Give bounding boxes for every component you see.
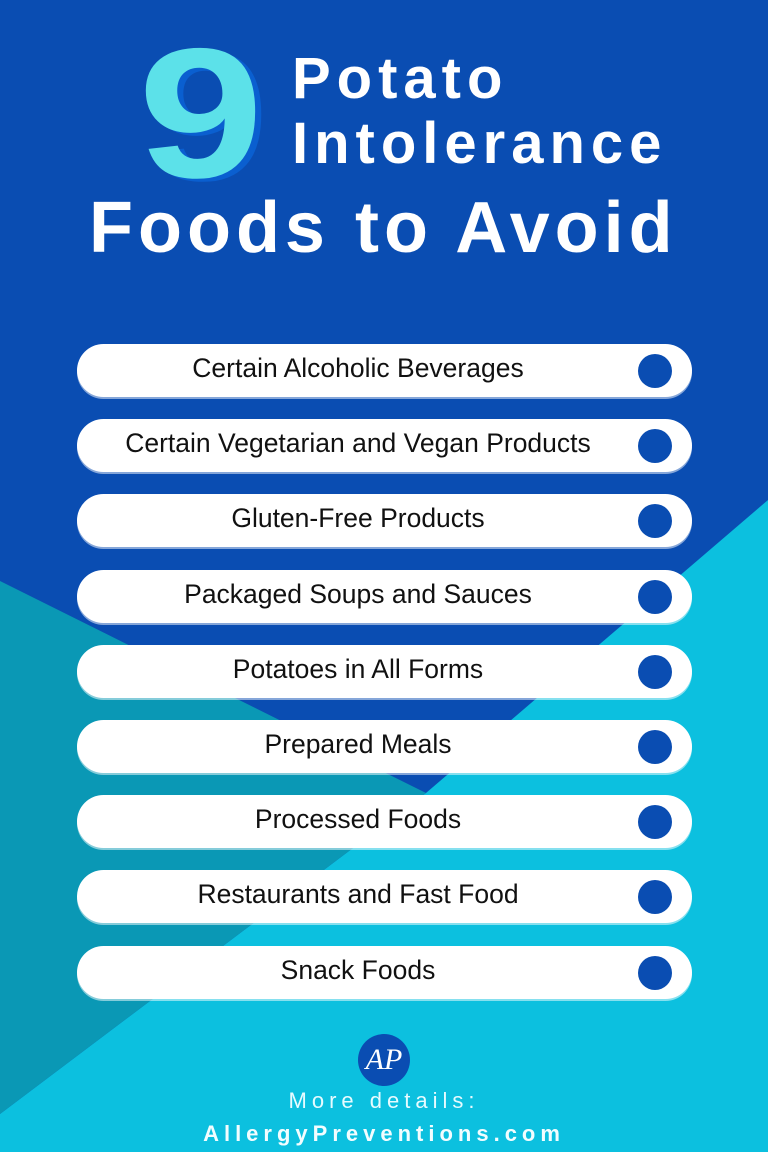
website: AllergyPreventions.com bbox=[203, 1121, 565, 1146]
item 4: Packaged Soups and Sauces bbox=[184, 579, 532, 609]
title line: Potato: Potato bbox=[292, 46, 508, 111]
item 6: Prepared Meals bbox=[264, 729, 452, 759]
item 7: Processed Foods bbox=[255, 804, 461, 834]
more details text: More details: bbox=[289, 1088, 479, 1113]
item 3 bbox=[77, 494, 692, 547]
footer bbox=[203, 1034, 565, 1146]
item 9: Snack Foods bbox=[281, 955, 435, 985]
item 8 bbox=[77, 870, 692, 923]
item 1: Certain Alcoholic Beverages bbox=[192, 353, 524, 383]
item 1 bbox=[77, 344, 692, 397]
item 8: Restaurants and Fast Food bbox=[197, 879, 519, 909]
item 3: Gluten-Free Products bbox=[231, 503, 485, 533]
item 2 bbox=[77, 419, 692, 472]
icon: AP logo bbox=[358, 1034, 410, 1086]
item 9 bbox=[77, 946, 692, 999]
item 2: Certain Vegetarian and Vegan Products bbox=[125, 428, 591, 458]
item 4 bbox=[77, 570, 692, 623]
title bbox=[89, 11, 678, 268]
item 6 bbox=[77, 720, 692, 773]
item 5 bbox=[77, 645, 692, 698]
icon: AP logo: AP bbox=[366, 1043, 402, 1076]
item 5: Potatoes in All Forms bbox=[233, 654, 483, 684]
title line: Foods to Avoid: Foods to Avoid bbox=[89, 188, 678, 268]
list of foods bbox=[77, 344, 692, 1001]
big number 9: 9 bbox=[138, 11, 264, 217]
item 7 bbox=[77, 795, 692, 848]
title line: Intolerance: Intolerance bbox=[292, 111, 667, 176]
